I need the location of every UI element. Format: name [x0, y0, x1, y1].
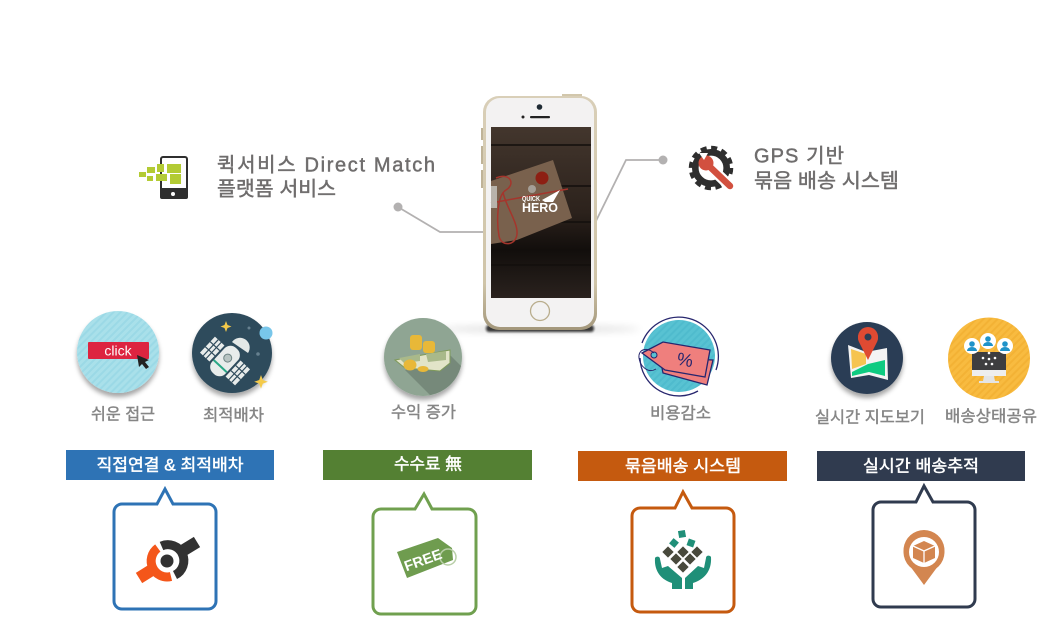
heading: GPS bundled delivery: GPS 기반 [754, 144, 844, 168]
icon: monitor and users [948, 318, 1030, 400]
callout: bundled delivery [632, 492, 734, 612]
label: increased revenue: 수익 증가 [391, 404, 456, 422]
icon: hands with blocks [655, 530, 711, 589]
icon: discount tag [639, 317, 718, 396]
banner: bundled delivery: 묶음배송 시스템 [625, 456, 741, 476]
banner: real-time tracking: 실시간 배송추적 [863, 456, 979, 476]
logo text [522, 190, 560, 215]
label: delivery status sharing: 배송상태공유 [945, 408, 1037, 426]
icon: connector [139, 542, 197, 578]
connector line: left [394, 202, 483, 232]
banner: real-time tracking [817, 451, 1025, 481]
callout: direct connection [114, 489, 216, 609]
heading: direct match platform [217, 154, 435, 200]
app screen [491, 127, 591, 298]
label: optimal dispatch: 최적배차 [203, 406, 264, 424]
icon: package pin [903, 530, 944, 585]
logo text: HERO [522, 201, 558, 215]
icon: map pin [831, 322, 903, 394]
connector line: right [596, 156, 668, 221]
banner: no fee [323, 450, 532, 480]
heading: GPS bundled delivery [754, 144, 899, 192]
callout: no fee [373, 494, 476, 614]
phone [440, 94, 640, 332]
icon: free tag: FREE [402, 547, 445, 575]
banner: direct connection: 직접연결 & 최적배차 [96, 456, 244, 474]
label: real-time map view: 실시간 지도보기 [815, 408, 925, 426]
banner: no fee: 수수료 無 [394, 454, 462, 474]
heading: direct match platform: 플랫폼 서비스 [217, 178, 336, 200]
icon: gear and wrench [691, 148, 731, 188]
icon: discount tag: % [675, 349, 695, 371]
banner: bundled delivery [578, 451, 787, 481]
callout: real-time tracking [873, 486, 975, 607]
label: easy access: 쉬운 접근 [91, 406, 155, 424]
logo text: QUICK [522, 196, 540, 203]
icon: click [77, 311, 159, 393]
banner: direct connection [66, 450, 274, 480]
heading: GPS bundled delivery: 묶음 배송 시스템 [754, 170, 899, 192]
icon: money [384, 318, 462, 396]
heading: direct match platform: 퀵서비스 Direct Match [217, 154, 435, 176]
icon: mobile with green blocks [139, 157, 188, 199]
label: cost reduction: 비용감소 [650, 404, 711, 422]
icon: satellite [192, 313, 272, 393]
icon: click: click [104, 342, 133, 358]
